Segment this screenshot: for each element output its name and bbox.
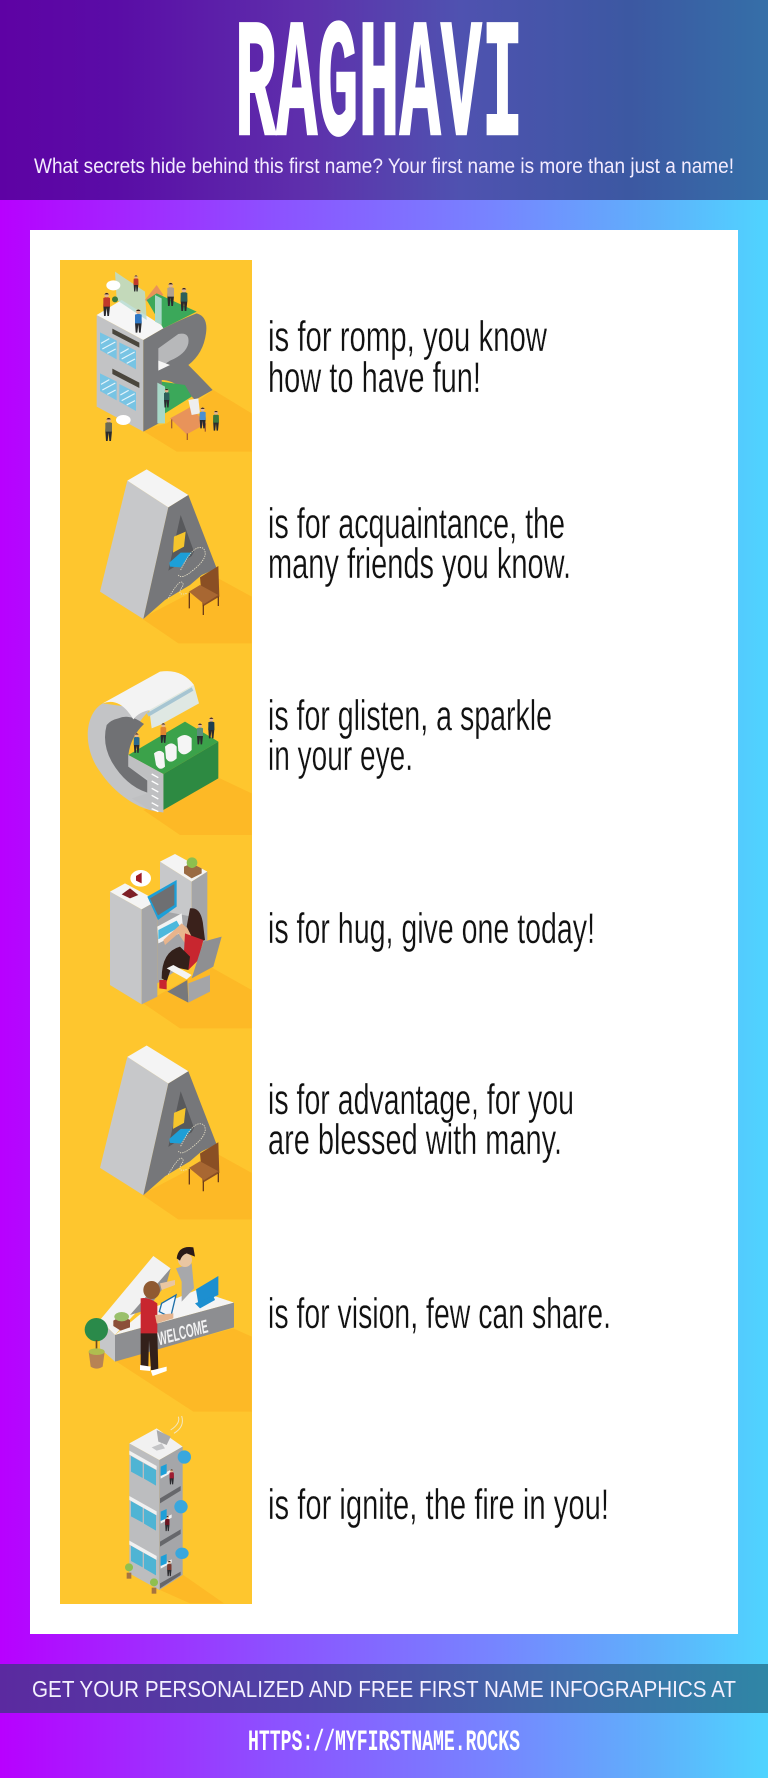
icon: letter I tower xyxy=(125,1416,224,1603)
footer url: HTTPS://MYFIRSTNAME.ROCKS xyxy=(248,1726,520,1760)
icon: letter A with chair xyxy=(100,469,252,643)
text: H line: is for hug, give one today! xyxy=(268,905,595,953)
text: A line 2: is for advantage, for you xyxy=(268,1076,574,1124)
welcome sign text: WELCOME xyxy=(155,1315,211,1349)
panel: yellow illustration column xyxy=(60,260,252,1604)
text: A line: is for acquaintance, the xyxy=(268,500,565,548)
icon: letter G with green block xyxy=(88,671,252,835)
text: R line: is for romp, you know xyxy=(268,313,548,361)
text: A line: many friends you know. xyxy=(268,540,571,588)
header band xyxy=(0,0,768,200)
text: R line: how to have fun! xyxy=(268,354,481,402)
icon: letter V reception desk xyxy=(85,1247,252,1412)
icon: letter A with chair (repeat) xyxy=(100,1046,252,1220)
panel: white card xyxy=(30,230,738,1634)
icon: letter H with woman at desk xyxy=(110,854,252,1028)
icon: letter R building xyxy=(97,272,252,452)
text: A line 2: are blessed with many. xyxy=(268,1116,562,1164)
text: G line: is for glisten, a sparkle xyxy=(268,692,552,740)
text: I line: is for ignite, the fire in you! xyxy=(268,1481,609,1529)
text: G line: in your eye. xyxy=(268,732,413,780)
footer band xyxy=(0,1664,768,1713)
